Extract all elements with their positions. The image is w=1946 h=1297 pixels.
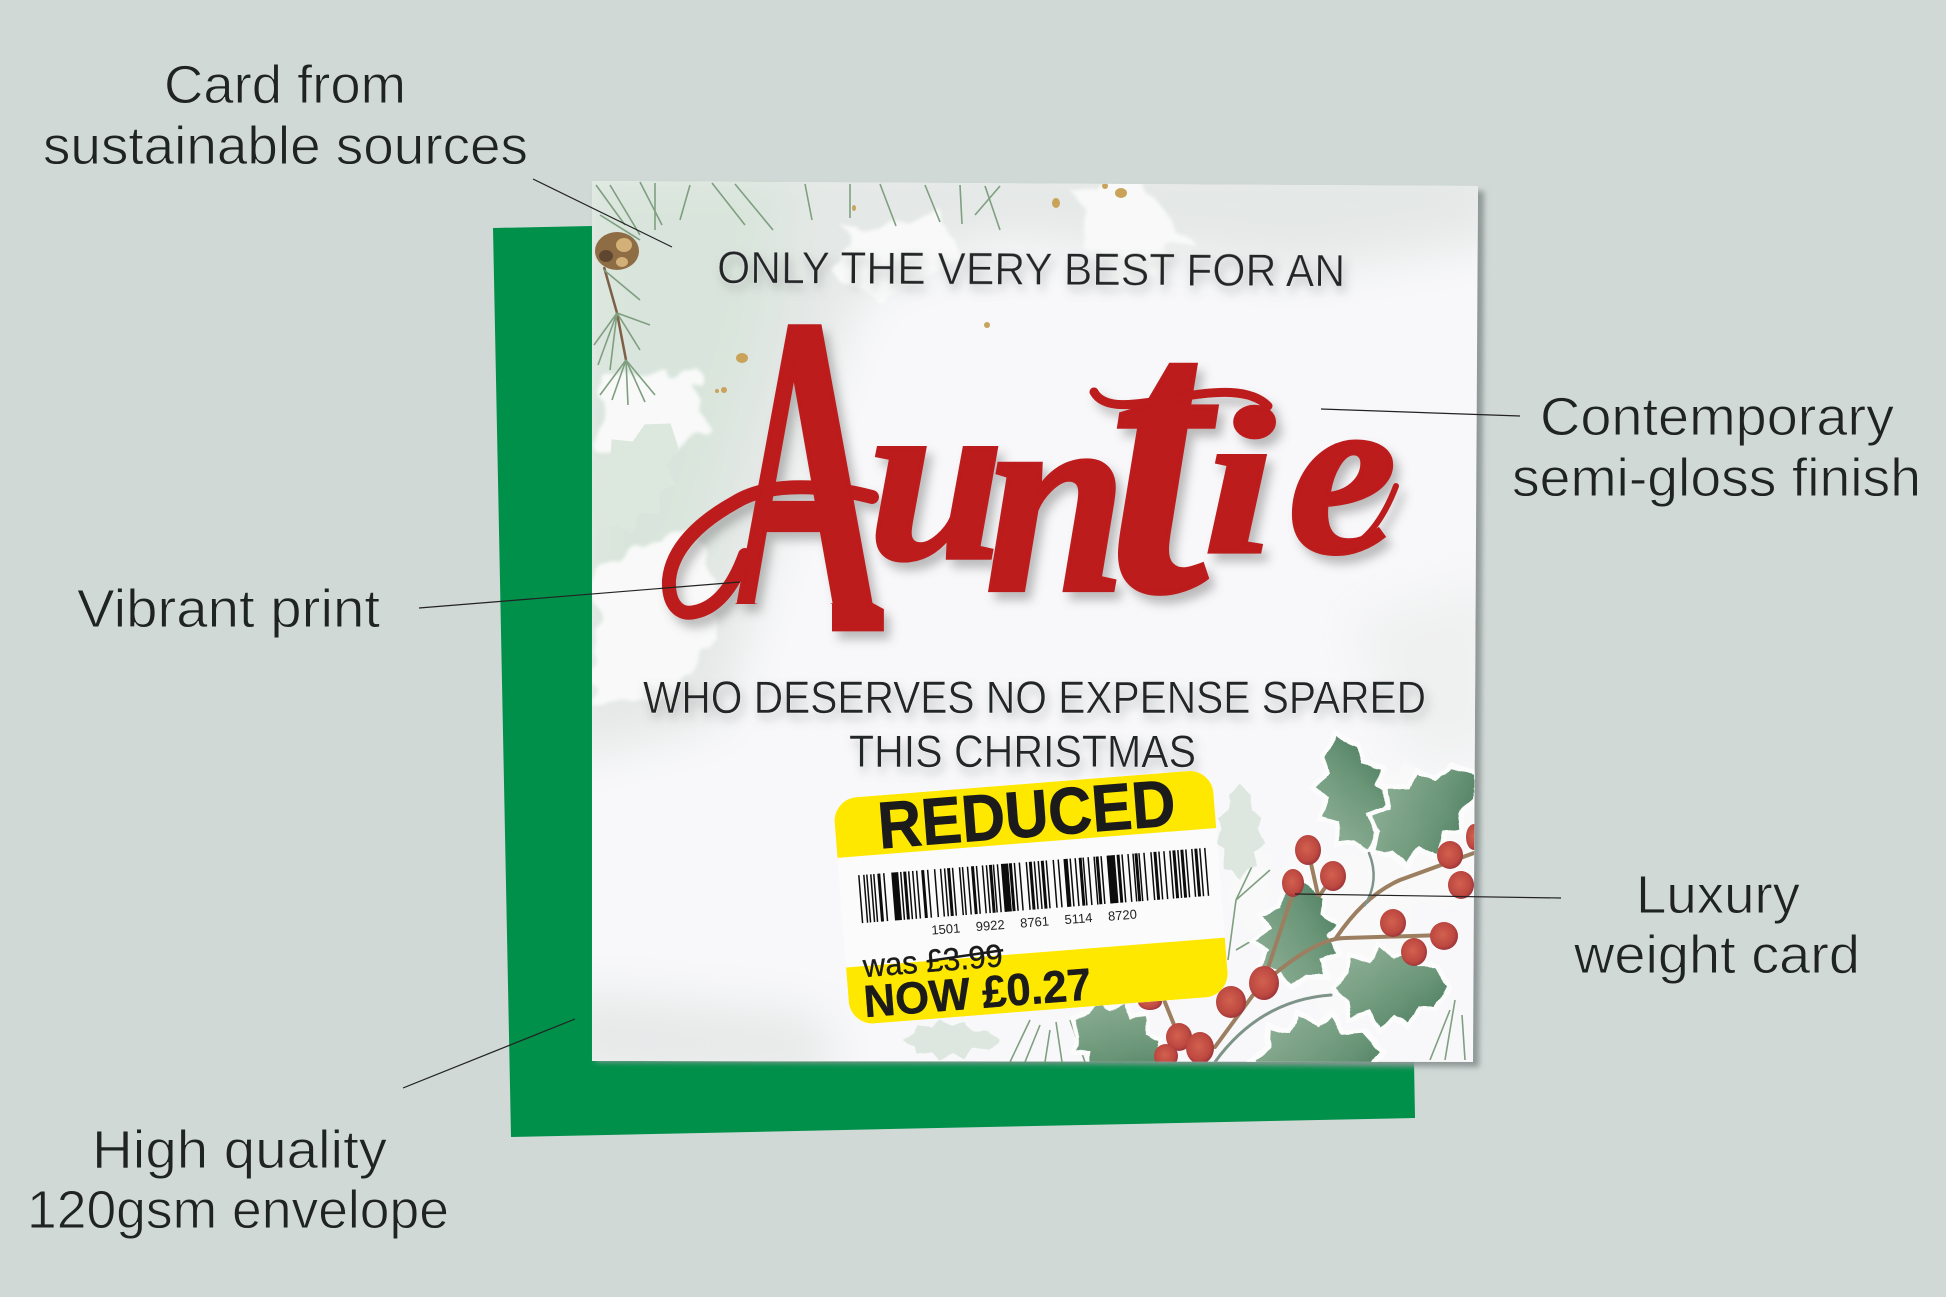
- leader line: luxury card: [1295, 894, 1561, 898]
- text: who deserves: WHO DESERVES NO EXPENSE SPARED: [643, 672, 1426, 723]
- pale left leaf: [610, 424, 678, 465]
- label: sustainable sources: sustainable sources: [43, 116, 528, 176]
- leader line: envelope: [403, 1019, 575, 1088]
- label: envelope: [27, 1120, 449, 1240]
- heading: only the very best: ONLY THE VERY BEST FOR AN: [717, 242, 1345, 296]
- letter A wrapper: A: [725, 224, 884, 727]
- panel: greeting card: [592, 181, 1478, 1062]
- holly branches: [1160, 850, 1474, 1062]
- leader line: vibrant print: [419, 582, 740, 608]
- barcode digits: 1501 9922 8761 5114 8720: [931, 907, 1137, 938]
- watercolour wash: [592, 181, 1478, 1062]
- label: vibrant print: Vibrant print: [77, 579, 380, 639]
- white petals: [592, 184, 1475, 896]
- now price: NOW £0.27: [862, 958, 1093, 1027]
- t crossbar swash: [1094, 392, 1268, 406]
- label: semi-gloss finish: semi-gloss finish: [1512, 448, 1921, 508]
- label: luxury weight card: weight card: [1573, 925, 1860, 985]
- sticker heading: REDUCED: [875, 765, 1178, 862]
- card shadow: [596, 186, 1484, 1067]
- label: semi-gloss finish: [1512, 387, 1921, 508]
- label: luxury weight card: Luxury: [1636, 865, 1800, 925]
- leader line: semi-gloss: [1321, 409, 1520, 416]
- heading: Auntie script: u: [868, 345, 1004, 610]
- heading: Auntie script: n: [985, 346, 1127, 650]
- label: envelope: High quality: [92, 1120, 387, 1180]
- e tail swash: [1340, 486, 1396, 548]
- label: envelope: 120gsm envelope: [27, 1180, 449, 1240]
- label: sustainable sources: Card from: [164, 55, 406, 115]
- was price: was £3.99: [861, 937, 1004, 984]
- icon: red berries: [1138, 824, 1482, 1068]
- label: sustainable sources: [43, 55, 528, 176]
- icon: pine cone: [595, 232, 639, 270]
- sticker: reduced price label: [832, 762, 1230, 1028]
- text: this christmas: THIS CHRISTMAS: [849, 726, 1196, 777]
- pale holly leaves: [903, 783, 1265, 1061]
- heading: Auntie script: [662, 324, 1408, 645]
- leader line: sustainable sources: [533, 179, 672, 247]
- pine branches: [594, 182, 1465, 1062]
- envelope: [493, 226, 1415, 1137]
- A swash: [669, 487, 872, 613]
- barcode: [859, 848, 1209, 923]
- label: semi-gloss finish: Contemporary: [1540, 387, 1894, 447]
- gold flecks: [715, 183, 1127, 393]
- heading: Auntie script: t: [1108, 235, 1220, 677]
- icon: holly leaves: [1070, 736, 1475, 1062]
- heading: Auntie script: e: [1288, 343, 1397, 603]
- heading: Auntie script: i: [1203, 365, 1275, 598]
- label: luxury weight card: [1573, 865, 1860, 985]
